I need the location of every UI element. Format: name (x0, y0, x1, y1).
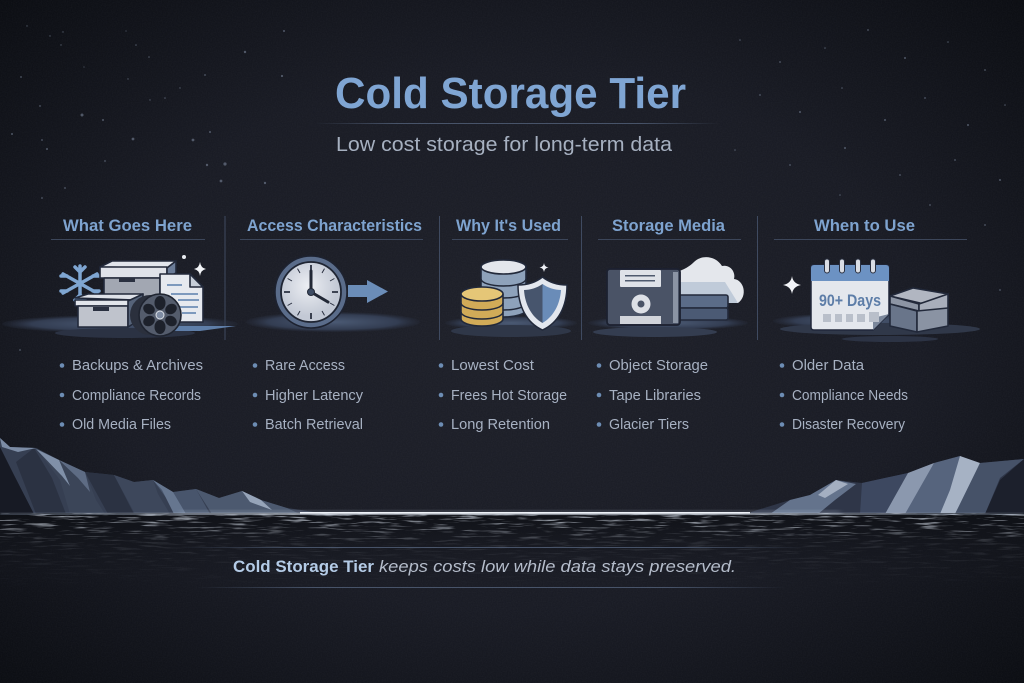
heading: storage media: Storage Media (612, 217, 726, 235)
icon: calendar with archive box (773, 259, 980, 342)
heading: what goes here: What Goes Here (63, 217, 192, 235)
icon: coins, data stack and shield (445, 260, 577, 337)
left mountains (0, 438, 314, 515)
water (0, 513, 1024, 588)
list: storage media: Glacier Tiers (609, 417, 689, 433)
list: why it's used: Lowest Cost (451, 358, 534, 374)
list: why it's used (439, 358, 567, 433)
icon: floppy disk, drives and cloud (588, 257, 748, 337)
landscape: frozen shoreline (0, 438, 1024, 570)
footer statement (233, 557, 736, 576)
list: when to use: Older Data (792, 358, 865, 374)
list: access characteristics (253, 358, 364, 433)
footer rule top (176, 547, 810, 548)
list: what goes here: Backups & Archives (72, 358, 203, 374)
list: when to use: Disaster Recovery (792, 417, 906, 433)
footer statement: Cold Storage Tier (233, 557, 374, 576)
list: storage media: Tape Libraries (609, 388, 701, 404)
list: access characteristics: Batch Retrieval (265, 417, 363, 433)
footer statement: keeps costs low while data stays preserved. (379, 557, 736, 576)
subtitle: Low cost storage for long-term data (336, 134, 673, 156)
calendar label: 90+ Days (819, 291, 881, 310)
right mountains (751, 456, 1024, 515)
heading: when to use: When to Use (814, 217, 915, 235)
horizon glow (180, 510, 840, 515)
title: Cold Storage Tier (335, 69, 686, 118)
list: what goes here: Compliance Records (72, 388, 201, 404)
list: storage media: Object Storage (609, 358, 708, 374)
list: access characteristics: Rare Access (265, 358, 345, 374)
list: access characteristics: Higher Latency (265, 388, 364, 404)
column dividers (224, 216, 758, 340)
panel: why it's used (439, 217, 577, 433)
icon: archive boxes, snowflake, document and film reel (2, 255, 238, 338)
panel: when to use (773, 217, 980, 433)
list: when to use: Compliance Needs (792, 388, 908, 404)
list: why it's used: Long Retention (451, 417, 550, 433)
footer rule bottom (196, 587, 786, 588)
icon: clock with arrow (246, 256, 420, 332)
list: why it's used: Frees Hot Storage (451, 388, 567, 404)
list: what goes here (60, 358, 203, 433)
list: what goes here: Old Media Files (72, 417, 171, 433)
list: storage media (597, 358, 708, 433)
panel: what goes here (2, 217, 238, 433)
heading: access characteristics: Access Characteristics (247, 217, 422, 235)
panel: storage media (588, 217, 748, 433)
list: when to use (780, 358, 908, 433)
panel: access characteristics (240, 217, 423, 433)
heading: why it's used: Why It's Used (456, 217, 561, 235)
title rule (315, 123, 720, 124)
